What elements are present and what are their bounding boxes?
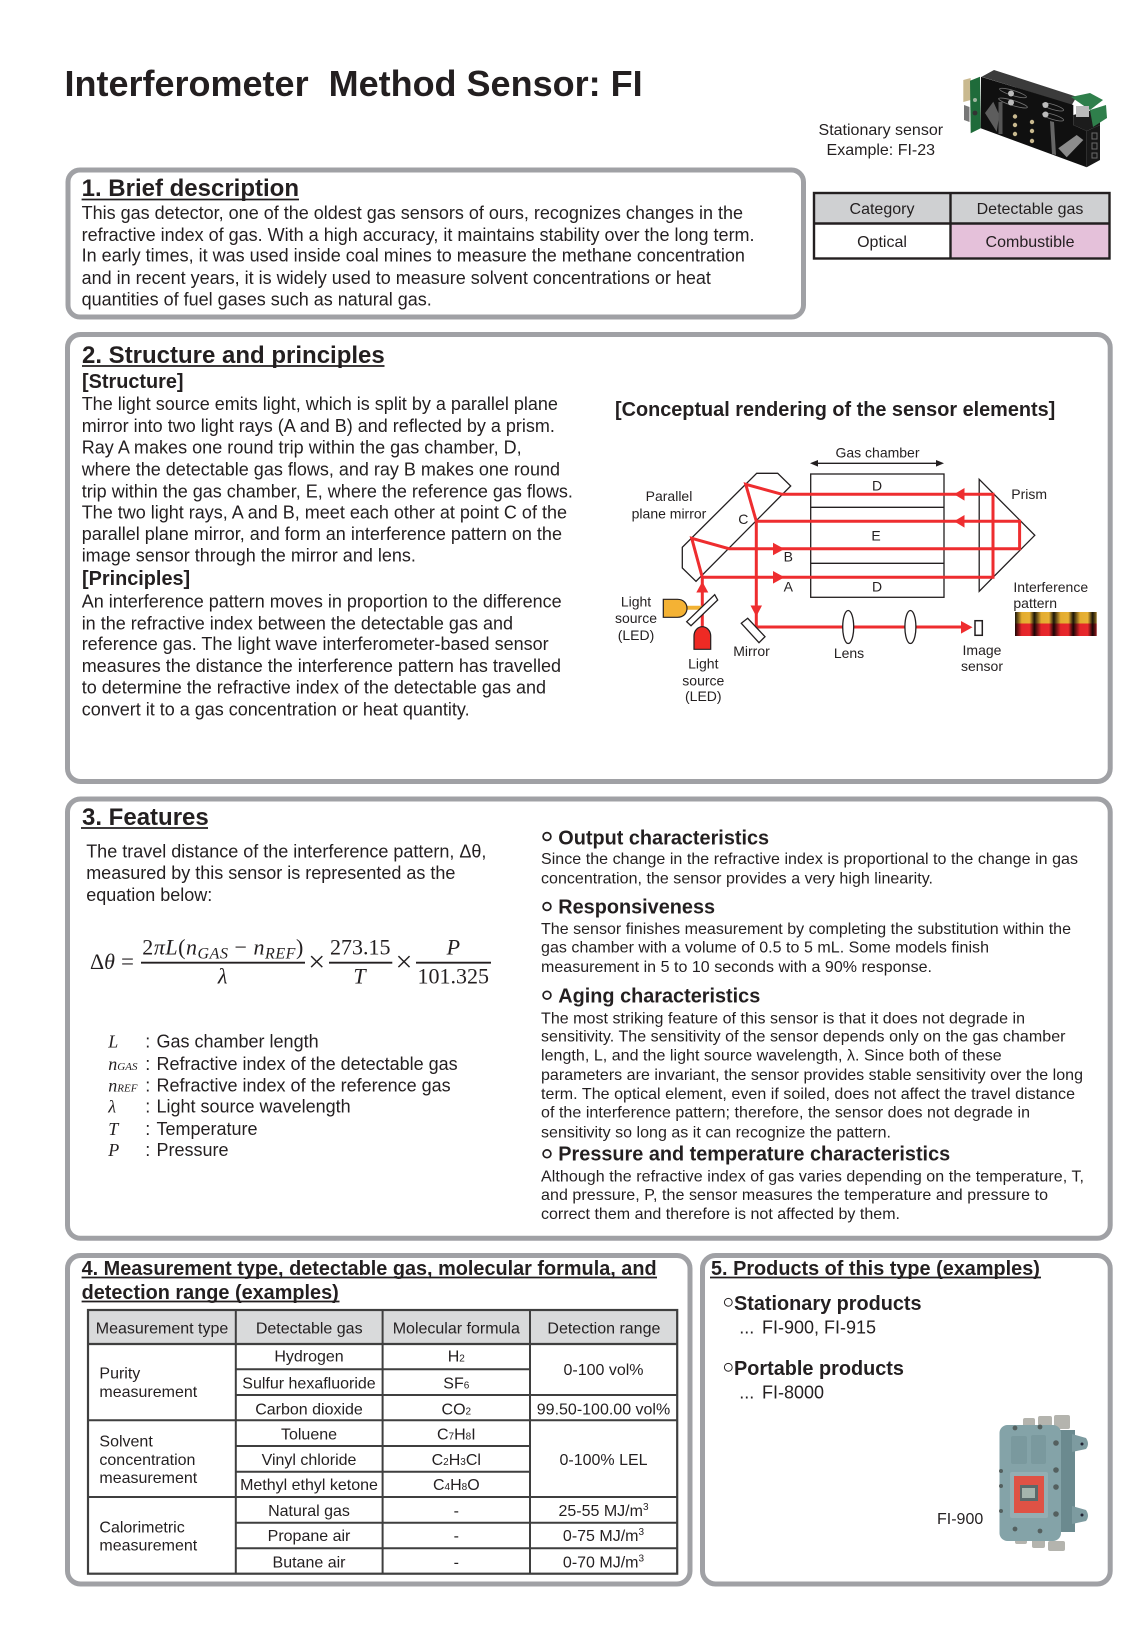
diagram labels: Prism [1011,486,1047,502]
legend: equation symbols: Refractive index of the reference gas [156,1076,451,1096]
subheading: structure: [Structure] [82,371,184,393]
text: brief description body: refractive index of gas. With a high accuracy, it maintains stability over the long term. [82,225,755,245]
diagram labels: source [615,610,657,626]
feature: responsiveness: The sensor finishes measurement by completing the substitution within the [541,921,1071,938]
legend: equation symbols: : [145,1032,150,1052]
lenses [843,610,916,644]
table: measurement data: - [454,1554,459,1571]
heading: measurement type: detection range (examples) [82,1282,339,1304]
heading: measurement type: 4. Measurement type, detectable gas, molecular formula, and [82,1258,657,1280]
panel: 4. measurement type table [68,1256,690,1584]
feature: output characteristics: concentration, the sensor provides a very high linearity. [541,870,933,887]
table: category and detectable gas [813,192,1110,259]
table: measurement data: 99.50-100.00 vol% [537,1401,670,1418]
heading: brief description: 1. Brief description [82,175,299,202]
legend: equation symbols: T [108,1119,120,1139]
table: measurement data: - [454,1528,459,1545]
legend: equation symbols [107,1032,458,1160]
legend: equation symbols: Pressure [156,1140,229,1160]
feature: aging characteristics: of the interference pattern; therefore, the sensor does not degrade in [541,1105,1030,1122]
legend: equation symbols: nREF [108,1076,138,1096]
table: measurement data: Carbon dioxide [255,1401,363,1418]
list: portable products: Portable products [734,1358,904,1380]
caption: stationary sensor: Example: FI-23 [827,142,935,159]
legend: equation symbols: : [145,1076,150,1096]
text: brief description body: This gas detector, one of the oldest gas sensors of ours, recognizes changes in the [82,203,743,223]
table: measurement data: 25-55 MJ/m [558,1503,643,1520]
legend: equation symbols: L [107,1032,118,1052]
table: measurement data: 3 [639,1527,645,1538]
equation: × [308,946,325,978]
table: measurement data: Sulfur hexafluoride [242,1375,376,1392]
equation: P [446,934,460,959]
text: brief description body: quantities of fuel gases such as natural gas. [82,289,432,309]
red light paths [692,484,1020,627]
legend: equation symbols: P [107,1140,119,1160]
diagram: sensor elements [615,445,1097,704]
text: structure body: image sensor through the mirror and lens. [82,545,416,565]
legend: equation symbols: : [145,1054,150,1074]
text: principles body: An interference pattern moves in proportion to the difference [82,591,562,611]
feature: pressure and temperature characteristics: Pressure and temperature characteristics [558,1143,950,1165]
diagram labels: D [872,478,882,494]
diagram labels: pattern [1013,595,1057,611]
list: stationary products [724,1293,922,1337]
text: principles body: in the refractive index between the detectable gas and [82,613,513,633]
title: Interferometer Method Sensor: FI [64,63,643,104]
feature: aging characteristics: term. The optical element, even if soiled, does not affect the travel distance [541,1086,1075,1103]
image: stationary sensor FI-23 [963,70,1107,167]
table: measurement data: Methyl ethyl ketone [240,1477,378,1494]
prism [979,479,1035,591]
table: measurement data: C4H8O [433,1477,480,1494]
table: measurement data: 3 [639,1553,645,1564]
feature: pressure and temperature characteristics: and pressure, P, the sensor measures the temperature and pressure to [541,1187,1048,1204]
caption: stationary sensor: Stationary sensor [819,122,944,139]
feature: aging characteristics: length, L, and the light source wavelength, λ. Since both of these [541,1048,1002,1065]
legend: equation symbols: : [145,1140,150,1160]
table: measurement data: Hydrogen [274,1349,344,1366]
table: measurement data: Natural gas [268,1503,350,1520]
feature: responsiveness [541,897,1071,976]
diagram labels: B [784,549,793,565]
parallel plane mirror [682,473,791,581]
subheading: conceptual rendering: [Conceptual rendering of the sensor elements] [615,399,1055,421]
diagram labels: sensor [961,658,1003,674]
diagram labels: source [682,672,725,688]
table: measurement data: Detectable gas [256,1320,363,1337]
light source: red LED [694,627,711,649]
equation: 273.15 [330,934,390,959]
subheading: principles: [Principles] [82,568,190,590]
list: stationary products: FI-900, FI-915 [762,1317,876,1337]
equation: λ [217,963,227,988]
table: measurement data: C7H8I [437,1426,476,1443]
list: portable products [724,1358,904,1402]
table: measurement data: Toluene [281,1426,337,1443]
table: measurement data: Measurement type [96,1320,228,1337]
mirror [741,618,765,643]
table: measurement data: Solvent [99,1434,153,1450]
text: brief description body [82,203,755,309]
table: measurement data: - [454,1503,459,1520]
table: category and detectable gas: Optical [857,234,907,251]
text: structure body: where the detectable gas flows, and ray B makes one round [81,459,560,479]
table: measurement data: SF6 [443,1375,470,1392]
list: stationary products: ... [739,1317,754,1337]
table: category and detectable gas: Category [850,201,914,218]
text: principles body: measures the distance the interference pattern has travelled [82,656,561,676]
equation: REF [264,945,296,962]
equation: T [353,963,367,988]
table: measurement data: 0-70 MJ/m [563,1554,639,1571]
text: structure body: trip within the gas chamber, E, where the reference gas flows. [82,481,573,501]
panel: 5. products [702,1256,1110,1584]
feature: pressure and temperature characteristics: Although the refractive index of gas varies depending on the temperature, T, [541,1169,1084,1186]
table: measurement data: C2H3Cl [432,1452,481,1469]
feature: output characteristics: Output characteristics [558,827,769,849]
feature: pressure and temperature characteristics: correct them and therefore is not affected by them. [541,1206,900,1223]
feature: pressure and temperature characteristics [541,1143,1084,1223]
list: portable products: ... [739,1382,754,1402]
equation: GAS [198,945,228,962]
feature: responsiveness: Responsiveness [558,897,715,919]
red arrowheads [696,488,972,634]
feature: aging characteristics: parameters are invariant, the sensor provides stable sensitivity over the long [541,1067,1083,1084]
table: measurement data: CO2 [442,1401,472,1418]
label: gas chamber with arrow: Gas chamber [835,445,920,461]
text: structure body [81,394,573,565]
image sensor [975,621,982,635]
table: measurement data: measurement [99,1384,198,1401]
equation: 2πL(n [142,934,197,959]
text: features intro [86,842,486,905]
legend: equation symbols: λ [107,1097,116,1117]
text: features intro: measured by this sensor is represented as the [86,863,455,883]
table: measurement data: H2 [448,1349,465,1366]
text: structure body: parallel plane mirror, and form an interference pattern on the [82,524,562,544]
table: measurement data: 0-75 MJ/m [563,1528,639,1545]
diagram labels: C [738,511,748,527]
diagram labels: Lens [834,645,864,661]
light source: yellow LED [663,599,687,617]
text: principles body: reference gas. The light wave interferometer-based sensor [82,634,549,654]
diagram labels: (LED) [618,627,654,643]
table: measurement data: Molecular formula [393,1320,520,1337]
text: principles body: to determine the refractive index of the detectable gas and [82,677,546,697]
legend: equation symbols: : [145,1097,150,1117]
diagram labels [615,478,1088,704]
equation: ) [296,934,303,959]
equation: n [254,934,265,959]
table: measurement data: Purity [99,1366,140,1382]
diagram labels: (LED) [685,688,722,704]
feature: aging characteristics: sensitivity. The sensitivity of the sensor depends only on the gas chamber [541,1029,1066,1046]
panel: 2. structure and principles [68,334,1110,782]
heading: measurement type [82,1258,657,1304]
gas chamber cells [811,474,944,597]
beam splitter [687,595,718,626]
list: portable products: FI-8000 [762,1382,824,1402]
text: brief description body: In early times, it was used inside coal mines to measure the methane concentration [82,246,745,266]
equation [90,934,491,988]
table: measurement data: Vinyl chloride [262,1452,357,1469]
diagram labels: A [784,579,794,595]
diagram labels: Parallel [646,488,692,504]
feature: aging characteristics: The most striking feature of this sensor is that it does not degrade in [541,1010,1025,1028]
equation: 101.325 [418,963,489,988]
diagram labels: Light [688,655,719,671]
diagram labels: Light [621,594,651,610]
text: features intro: equation below: [86,885,212,905]
text: structure body: The light source emits light, which is split by a parallel plane [82,394,558,414]
caption: stationary sensor [819,122,944,159]
text: principles body [82,591,562,719]
legend: equation symbols: : [145,1119,150,1139]
diagram labels: Interference [1013,579,1088,595]
legend: equation symbols: Light source wavelength [156,1097,351,1117]
label: FI-900: FI-900 [937,1511,983,1528]
table: measurement data: measurement [99,1537,198,1554]
heading: structure and principles: 2. Structure and principles [82,342,385,369]
feature: aging characteristics [541,986,1083,1142]
feature: aging characteristics: sensitivity so long as it can recognize the pattern. [541,1125,891,1142]
panel: 1. brief description [68,170,804,317]
equation: = [121,949,134,974]
feature: responsiveness: measurement in 5 to 10 seconds with a 90% response. [541,959,932,976]
list: stationary products: Stationary products [734,1293,922,1315]
diagram labels: plane mirror [632,505,707,521]
table: measurement data: Detection range [547,1320,660,1337]
heading: features: 3. Features [82,804,209,831]
diagram labels: Mirror [733,643,770,659]
image: FI-900 product [999,1415,1088,1551]
text: structure body: Ray A makes one round trip within the gas chamber, D, [82,437,522,457]
diagram labels: D [872,579,882,595]
equation: − [228,934,253,959]
legend: equation symbols: Gas chamber length [156,1032,319,1052]
diagram labels: Image [963,642,1002,658]
equation: × [396,946,412,978]
table: measurement data: Propane air [268,1528,351,1545]
table: category and detectable gas: Combustible [986,234,1075,251]
text: structure body: The two light rays, A and B, meet each other at point C of the [82,502,567,522]
yellow light beam [684,606,702,610]
label: gas chamber with arrow [810,445,944,467]
legend: equation symbols: nGAS [108,1054,138,1074]
feature: output characteristics [541,827,1078,887]
table: measurement data: 0-100% LEL [559,1452,648,1469]
panel: 3. features [68,799,1110,1238]
table: measurement data: Butane air [273,1554,346,1571]
table: measurement data: Calorimetric [99,1519,185,1536]
text: principles body: convert it to a gas concentration or heat quantity. [82,699,470,719]
table: measurement data: concentration [99,1452,195,1469]
text: features intro: The travel distance of the interference pattern, Δθ, [86,842,486,862]
text: structure body: mirror into two light rays (A and B) and reflected by a prism. [82,416,555,436]
table: category and detectable gas: Detectable gas [977,201,1083,218]
table: measurement data: measurement [99,1470,198,1487]
feature: aging characteristics: Aging characteristics [558,986,760,1008]
equation: Δθ [90,949,115,974]
legend: equation symbols: Refractive index of the detectable gas [156,1054,458,1074]
interference pattern [1015,612,1097,636]
text: brief description body: and in recent years, it is widely used to measure solvent concentrations or heat [82,268,711,288]
heading: products: 5. Products of this type (examples) [711,1258,1040,1280]
legend: equation symbols: Temperature [156,1119,258,1139]
feature: output characteristics: Since the change in the refractive index is proportional to the change in gas [541,851,1078,868]
table: measurement data: 3 [643,1502,649,1513]
table: measurement data [88,1310,677,1574]
feature: responsiveness: gas chamber with a volume of 0.5 to 5 mL. Some models finish [541,940,989,957]
table: measurement data: 0-100 vol% [563,1362,644,1379]
diagram labels: E [871,528,881,544]
